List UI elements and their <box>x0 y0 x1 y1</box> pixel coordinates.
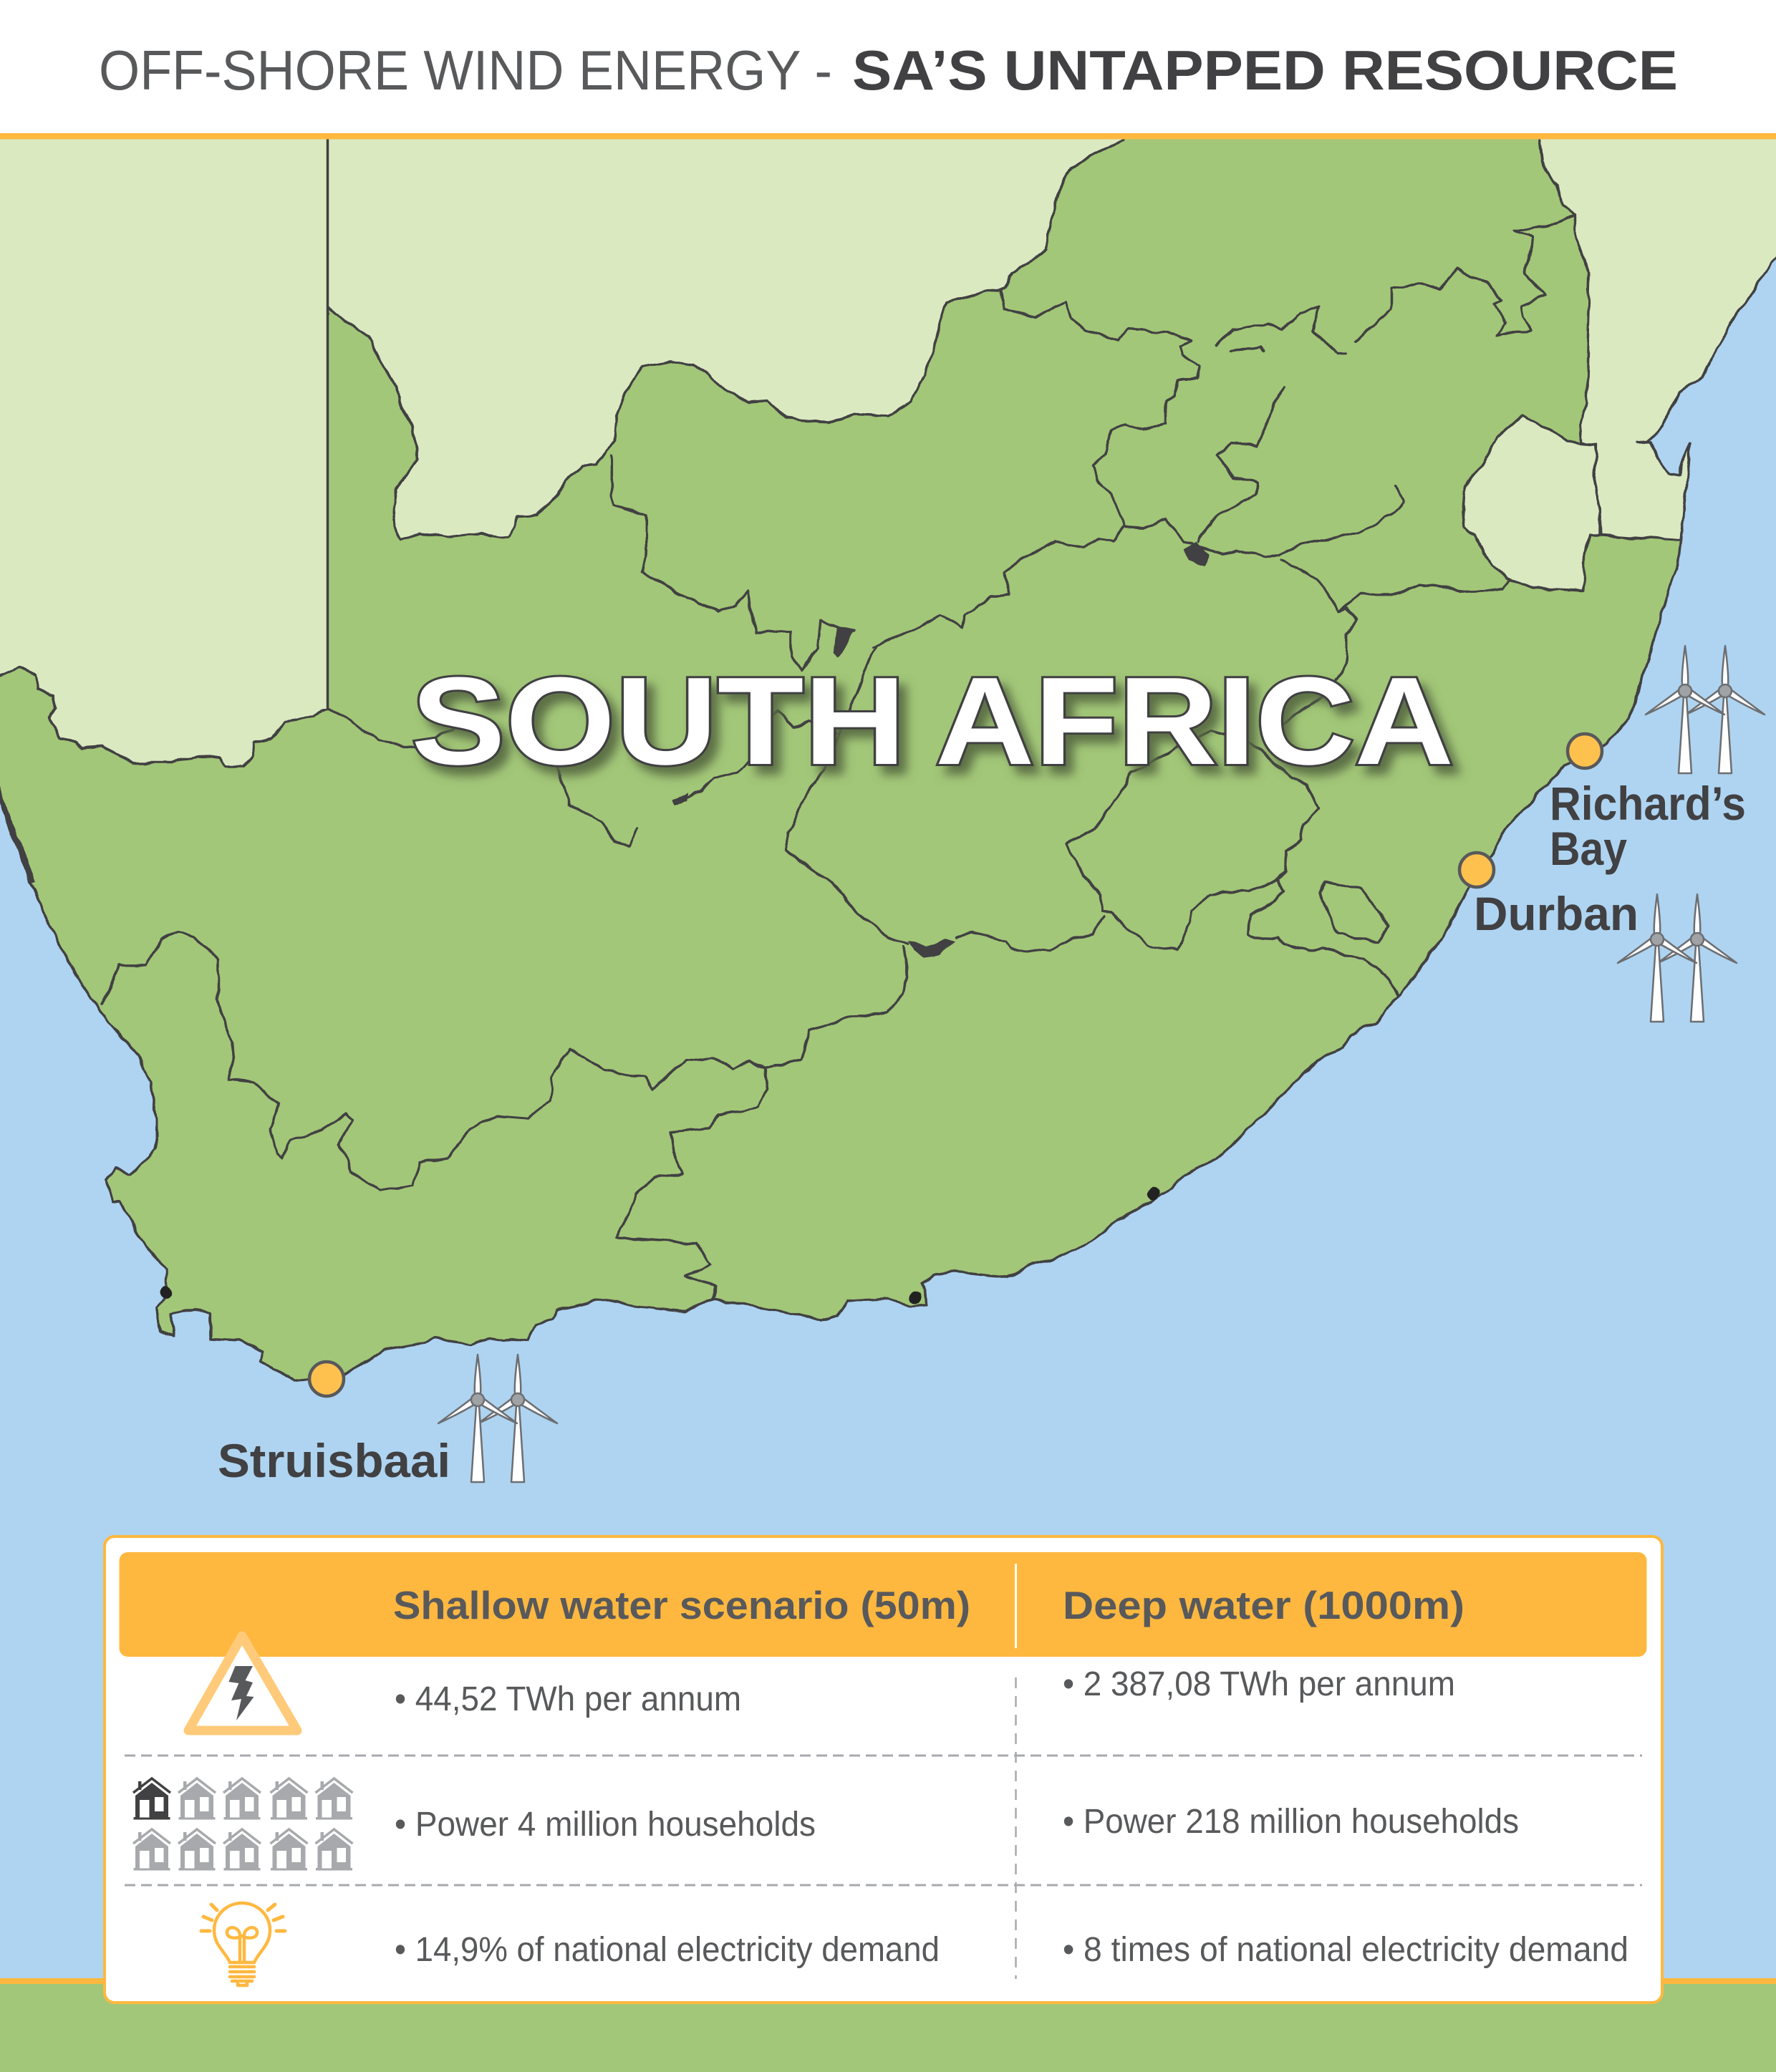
heading: deep water: Deep water (1000m) <box>1063 1583 1464 1627</box>
label: Durban: Durban <box>1474 887 1639 940</box>
Swaziland <box>1463 415 1601 591</box>
table card <box>105 1536 1662 2003</box>
label: Richard's Bay: Bay <box>1550 822 1627 875</box>
table header bar <box>119 1552 1647 1657</box>
map title: South Africa <box>411 651 1454 790</box>
text: deep households: • Power 218 million households <box>1063 1803 1519 1841</box>
marker: Durban <box>1459 853 1494 887</box>
text: shallow households: • Power 4 million households <box>395 1806 816 1844</box>
icon: turbines Durban <box>1618 894 1737 1022</box>
title: OFF-SHORE WIND ENERGY - <box>99 39 832 102</box>
South Africa land <box>0 119 1681 1380</box>
icon: electricity warning triangle <box>188 1636 297 1730</box>
neighbouring countries <box>0 119 1776 793</box>
city dots <box>160 1187 1160 1303</box>
text: deep demand: • 8 times of national electricity demand <box>1063 1931 1628 1969</box>
Mozambique coastline <box>1639 198 1776 541</box>
label: Richard's Bay <box>1550 777 1746 875</box>
title <box>99 39 1678 102</box>
marker: Richard's Bay <box>1568 734 1602 768</box>
dark river blobs <box>671 542 1209 957</box>
icon: turbines Richard's Bay <box>1646 646 1765 773</box>
header divider <box>1015 1564 1017 1648</box>
map title: South Africa: SOUTH <box>411 651 906 790</box>
text: shallow energy: • 44,52 TWh per annum <box>395 1680 741 1718</box>
header band <box>0 0 1776 139</box>
title: SA’S UNTAPPED RESOURCE <box>852 39 1678 102</box>
text: deep energy: • 2 387,08 TWh per annum <box>1063 1665 1455 1703</box>
icon: households <box>133 1778 352 1870</box>
heading: shallow water: Shallow water scenario (50m) <box>393 1583 970 1627</box>
Namibia border straight line <box>315 136 335 709</box>
icon: light bulb <box>201 1903 285 1985</box>
map of South Africa <box>0 119 1776 1380</box>
panel: comparison table <box>105 1536 1662 2003</box>
text: shallow demand: • 14,9% of national electricity demand <box>395 1931 940 1969</box>
label: Richard's Bay: Richard’s <box>1550 777 1746 830</box>
bottom green band <box>0 1981 1776 2072</box>
thick north-west coast segment <box>0 783 33 883</box>
provincial borders <box>102 216 1574 1299</box>
bottom orange line <box>0 1978 1776 1984</box>
label: Struisbaai: Struisbaai <box>218 1434 450 1487</box>
marker: Struisbaai <box>309 1362 344 1396</box>
map title: South Africa: AFRICA <box>935 651 1454 790</box>
icon: turbines Struisbaai <box>438 1355 557 1482</box>
